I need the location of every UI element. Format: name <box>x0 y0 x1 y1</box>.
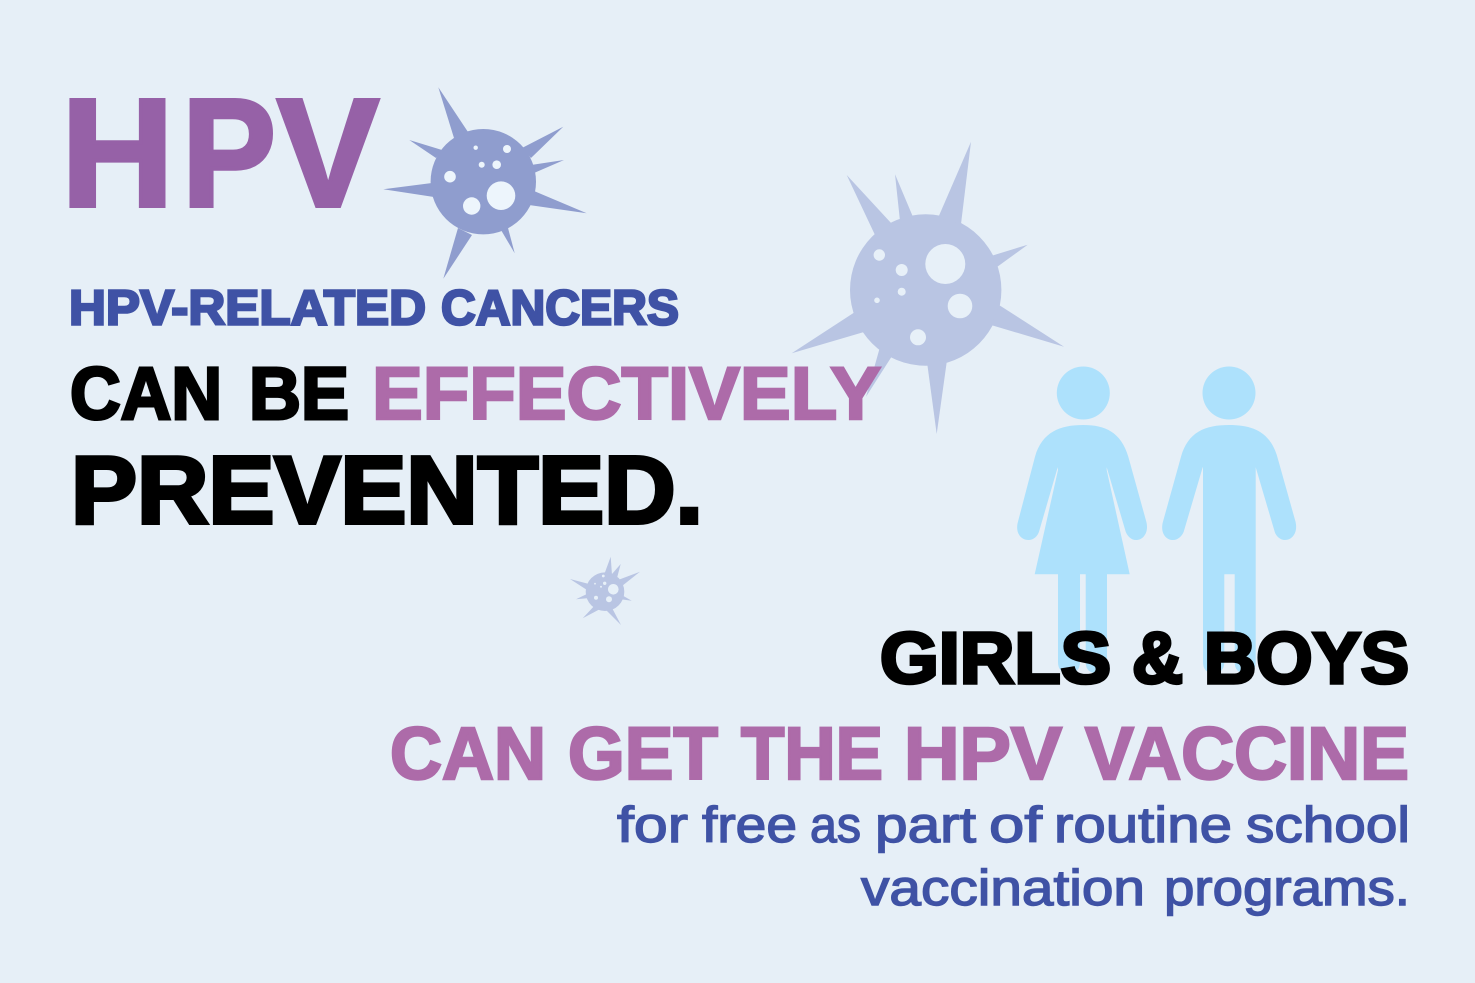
text: free as part of routine school vaccination programs: routine <box>1054 797 1232 853</box>
heading: can get the HPV vaccine: GET <box>568 712 718 795</box>
text: free as part of routine school vaccination programs: as <box>810 797 861 853</box>
text: free as part of routine school vaccination programs <box>617 797 1410 916</box>
heading: can get the HPV vaccine: THE <box>741 712 883 795</box>
heading: HPV-related cancers: CANCERS <box>441 282 679 336</box>
text: free as part of routine school vaccination programs: school <box>1246 797 1410 853</box>
heading: can be effectively <box>70 352 881 435</box>
title: HPV: V <box>277 67 379 239</box>
heading: girls and boys: BOYS <box>1204 619 1409 699</box>
text: free as part of routine school vaccination programs: free <box>702 797 797 853</box>
heading: girls and boys <box>880 619 1409 699</box>
title: HPV: P <box>182 67 276 239</box>
heading: HPV-related cancers <box>69 282 679 336</box>
heading: can be effectively: CAN <box>70 352 222 435</box>
heading: HPV-related cancers: HPV-RELATED <box>69 282 426 336</box>
heading: can get the HPV vaccine: CAN <box>390 712 546 795</box>
heading: can get the HPV vaccine <box>390 712 1409 795</box>
icon: virus small near title <box>383 87 587 279</box>
icon: boy figure <box>1162 366 1296 673</box>
icon: virus tiny <box>570 557 640 625</box>
text: free as part of routine school vaccination programs: part <box>875 797 976 853</box>
heading: girls and boys: GIRLS <box>880 619 1111 699</box>
icon: girl figure <box>1017 366 1147 673</box>
heading: prevented: PREVENTED. <box>71 437 703 544</box>
title: HPV: H <box>61 67 174 239</box>
heading: can get the HPV vaccine: VACCINE <box>1085 712 1409 795</box>
heading: girls and boys: & <box>1132 619 1183 699</box>
text: free as part of routine school vaccination programs: programs. <box>1164 860 1410 916</box>
text: free as part of routine school vaccination programs: for <box>617 797 688 853</box>
icon: virus large <box>792 142 1064 434</box>
heading: can be effectively: BE <box>249 352 349 435</box>
heading: can be effectively: EFFECTIVELY <box>372 352 881 435</box>
text: free as part of routine school vaccination programs: vaccination <box>861 860 1145 916</box>
heading: can get the HPV vaccine: HPV <box>904 712 1062 795</box>
text: free as part of routine school vaccination programs: of <box>989 797 1042 853</box>
title: HPV <box>61 67 379 239</box>
